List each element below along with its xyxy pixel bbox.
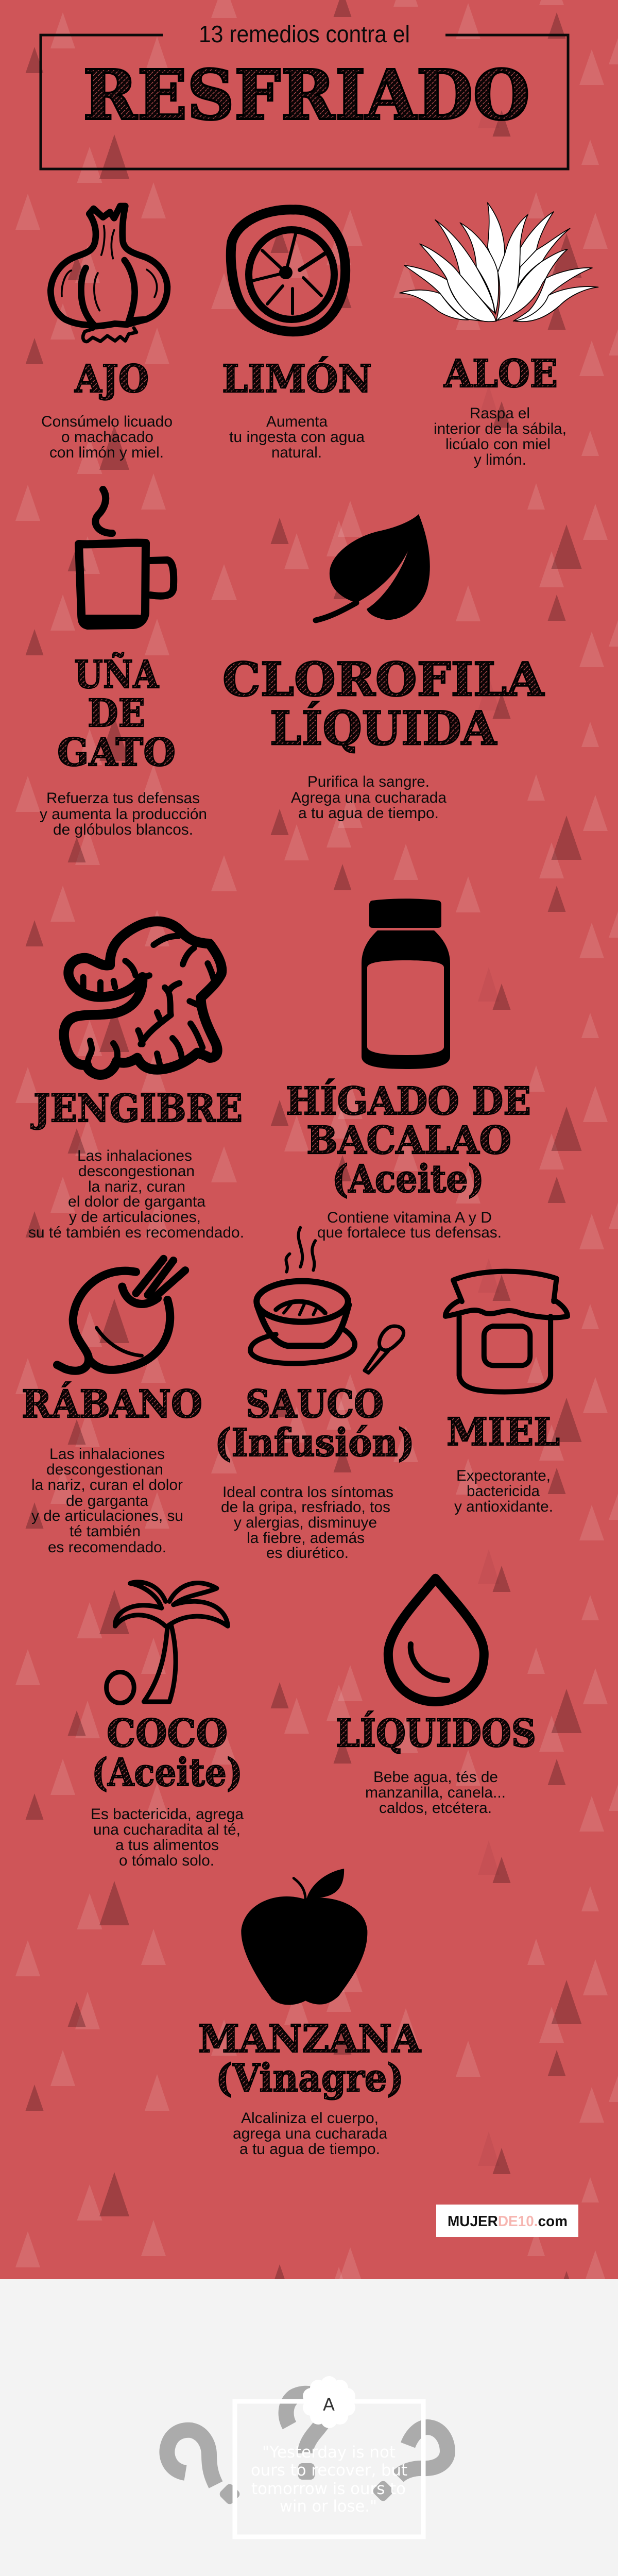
heading: ajo: AJO (74, 357, 149, 401)
text: clorofila liquida: Purifica la sangre. (307, 773, 430, 790)
text: limon: Aumenta (266, 413, 328, 430)
text: higado de bacalao (317, 1209, 502, 1241)
heading: una de gato: GATO (57, 731, 176, 775)
text: higado de bacalao: que fortalece tus defensas. (317, 1224, 502, 1241)
text: limon: tu ingesta con agua (229, 429, 365, 446)
heading: sauco infusion (215, 1382, 415, 1465)
text: aloe: licúalo con miel (445, 436, 551, 453)
text: rabano: la nariz, curan el dolor (31, 1477, 183, 1494)
text: higado de bacalao: Contiene vitamina A y D (327, 1209, 492, 1226)
title frame (41, 35, 568, 169)
text: manzana: Alcaliniza el cuerpo, (241, 2110, 379, 2127)
text: limon: natural. (271, 444, 322, 461)
heading: liquidos: LÍQUIDOS (336, 1710, 536, 1756)
panel: rabano (22, 1259, 202, 1556)
icon: lemon (231, 210, 346, 332)
heading: coco aceite: (Aceite) (92, 1751, 243, 1795)
text: miel: Expectorante, (456, 1467, 551, 1484)
panel: manzana (198, 1869, 422, 2158)
panel: clorofila liquida (222, 514, 544, 822)
quote text: ours to recover, but (251, 2461, 407, 2480)
quote frame (235, 2401, 423, 2537)
text: clorofila liquida: a tu agua de tiempo. (298, 805, 439, 822)
title block (41, 21, 568, 169)
panel: liquidos (336, 1579, 536, 1817)
text: jengibre: el dolor de garganta (68, 1193, 205, 1210)
logo: mujerde10: MUJERDE10.com (448, 2213, 568, 2230)
text: sauco (221, 1484, 393, 1562)
icon: palm and coconut (107, 1582, 228, 1703)
icon: question marks (167, 2394, 448, 2506)
panel: miel (445, 1272, 568, 1515)
quote text: win or lose." (280, 2497, 377, 2516)
main heading: RESFRIADO (83, 55, 530, 135)
text: miel: y antioxidante. (454, 1498, 553, 1515)
badge: scalloped A: A (323, 2395, 335, 2415)
text: coco: a tus alimentos (115, 1837, 219, 1854)
text: una de gato (40, 790, 207, 838)
heading: higado de bacalao aceite: BACALAO (306, 1118, 511, 1163)
text: liquidos: caldos, etcétera. (379, 1800, 492, 1817)
text: jengibre: descongestionan (78, 1163, 195, 1180)
text: una de gato: Refuerza tus defensas (46, 790, 200, 807)
text: sauco: es diurético. (266, 1545, 349, 1562)
text: jengibre (28, 1147, 244, 1241)
text: rabano: es recomendado. (48, 1539, 166, 1556)
icon: mug (79, 489, 174, 625)
heading: sauco infusion: (Infusión) (215, 1421, 415, 1465)
text: sauco: la fiebre, además (247, 1530, 365, 1547)
text: jengibre: Las inhalaciones (77, 1147, 192, 1164)
text: aloe (434, 405, 566, 468)
text: sauco: Ideal contra los síntomas (222, 1484, 393, 1501)
heading: manzana vinagre: (Vinagre) (216, 2056, 404, 2100)
panel: aloe (400, 202, 598, 468)
text: sauco: y alergias, disminuye (234, 1514, 377, 1531)
text: rabano: descongestionan (46, 1461, 163, 1478)
heading: clorofila liquida: LÍQUIDA (270, 701, 497, 756)
text: coco: Es bactericida, agrega (91, 1806, 244, 1823)
text: liquidos: Bebe agua, tés de (373, 1769, 498, 1786)
heading: manzana vinagre: MANZANA (198, 2017, 422, 2061)
text: miel (454, 1467, 553, 1515)
quote text (251, 2443, 407, 2516)
icon: honey jar (445, 1272, 568, 1392)
text: coco: una cucharadita al té, (93, 1821, 241, 1838)
text: liquidos (365, 1769, 506, 1817)
heading: limon: LIMÓN (222, 356, 372, 401)
heading: sauco infusion: SAUCO (246, 1382, 384, 1427)
text: una de gato: y aumenta la producción (40, 806, 207, 823)
icon: aloe plant (400, 202, 598, 321)
text: aloe: y limón. (474, 451, 526, 468)
heading: miel: MIEL (447, 1410, 560, 1454)
heading: manzana vinagre (198, 2017, 422, 2100)
panel: jengibre (28, 921, 244, 1241)
icon: leaf (316, 514, 430, 620)
text: rabano: y de articulaciones, su (31, 1507, 183, 1524)
heading: una de gato: UÑA (74, 652, 159, 697)
text: una de gato: de glóbulos blancos. (53, 821, 193, 838)
icon: apple (241, 1869, 367, 2005)
text: manzana: agrega una cucharada (233, 2125, 387, 2142)
text: jengibre: la nariz, curan (88, 1178, 185, 1195)
panel: coco (91, 1582, 244, 1869)
text: rabano: Las inhalaciones (49, 1446, 165, 1463)
heading: clorofila liquida: CLOROFILA (222, 652, 544, 707)
heading: una de gato (57, 652, 176, 775)
heading: higado de bacalao aceite: HÍGADO DE (286, 1078, 531, 1124)
text: ajo (41, 413, 173, 461)
panel: una de gato (40, 489, 207, 838)
quote text: tomorrow is ours to (251, 2480, 406, 2498)
text: rabano: de garganta (66, 1493, 148, 1510)
icon: garlic (50, 206, 167, 342)
text: aloe: Raspa el (470, 405, 530, 422)
panel: ajo (41, 206, 173, 461)
text: limon (229, 413, 365, 461)
title kicker: 13 remedios contra el (199, 21, 410, 47)
panel: sauco (215, 1228, 415, 1562)
panel: gray quote section (0, 2279, 618, 2576)
text: ajo: o machacado (61, 429, 153, 446)
panel: higado de bacalao (286, 899, 531, 1241)
heading: clorofila liquida (222, 652, 544, 756)
heading: higado de bacalao aceite (286, 1078, 531, 1201)
text: ajo: con limón y miel. (49, 444, 164, 461)
text: coco: o tómalo solo. (119, 1852, 214, 1869)
logo: mujerde10 (436, 2205, 578, 2237)
text: jengibre: su té también es recomendado. (28, 1224, 244, 1241)
quote text: "Yesterday is not (262, 2443, 396, 2462)
icon: soup bowl with spoon (250, 1228, 404, 1373)
icon: bottle (362, 899, 450, 1069)
panel: limon (222, 210, 372, 461)
heading: higado de bacalao aceite: (Aceite) (332, 1157, 484, 1201)
text: miel: bactericida (467, 1483, 540, 1500)
badge: scalloped A (303, 2376, 355, 2428)
icon: radish (57, 1259, 185, 1371)
text: aloe: interior de la sábila, (434, 420, 566, 437)
text: rabano (31, 1446, 183, 1556)
icon: ginger (64, 921, 222, 1075)
text: clorofila liquida: Agrega una cucharada (291, 789, 447, 806)
heading: una de gato: DE (88, 691, 145, 736)
text: manzana: a tu agua de tiempo. (239, 2141, 380, 2158)
heading: coco aceite (92, 1711, 243, 1795)
heading: coco aceite: COCO (107, 1711, 228, 1756)
text: coco (91, 1806, 244, 1869)
heading: rabano: RÁBANO (22, 1381, 202, 1427)
heading: aloe: ALOE (443, 352, 558, 396)
text: jengibre: y de articulaciones, (69, 1209, 201, 1226)
heading: jengibre: JENGIBRE (30, 1087, 243, 1131)
text: clorofila liquida (291, 773, 447, 822)
text: ajo: Consúmelo licuado (41, 413, 173, 430)
text: sauco: de la gripa, resfriado, tos (221, 1499, 390, 1516)
text: rabano: té también (70, 1523, 141, 1540)
text: liquidos: manzanilla, canela... (365, 1784, 506, 1801)
icon: water drop (388, 1579, 484, 1702)
text: manzana (233, 2110, 387, 2158)
